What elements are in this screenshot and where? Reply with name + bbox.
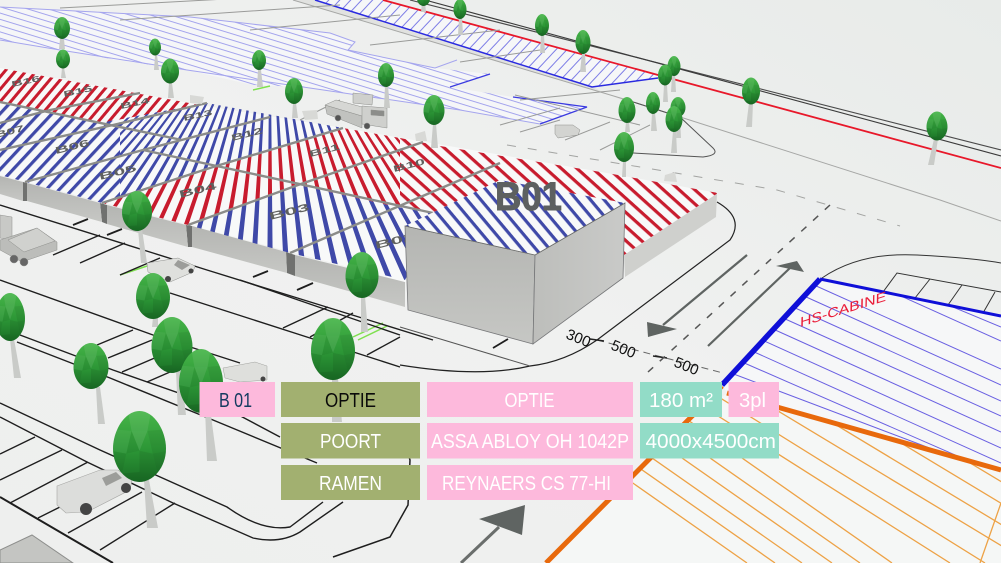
red roofs far [0,68,200,123]
roof unit labels: B05 [98,163,138,182]
roof unit labels: B04 [178,180,219,200]
cell: OPTIE value [427,382,633,417]
dimension labels [564,326,701,379]
tree [924,112,950,165]
cell: B 01 [200,382,275,417]
roof unit labels: B12 [230,125,264,143]
cell: door size: 4000x4500cm [646,431,776,453]
roof dividers [0,93,500,253]
small far vehicles [190,95,677,182]
tree [416,0,431,12]
tree [452,0,468,35]
road curve and dimension line [400,202,735,373]
cell: area: 180 m² [649,390,713,412]
blue roofs left [0,102,120,203]
truck left [0,215,57,266]
cell: REYNAERS: REYNAERS CS 77-HI [442,473,611,495]
red roof front [104,167,296,225]
tree [251,50,267,87]
roof unit labels: B13 [183,108,213,123]
parking bays [822,255,1001,313]
blue roof next to B01 [298,207,431,280]
cell: door size [640,423,779,458]
cell: POORT label: POORT [320,431,381,453]
cell: OPTIE label [281,382,420,417]
tree [740,78,762,127]
tree [133,273,173,327]
tree [147,317,197,415]
dimension labels: 500 [672,354,701,379]
truck far [325,93,387,129]
tree [617,97,637,132]
bottom left building [0,535,73,563]
cell: OPTIE label: OPTIE [325,390,376,412]
tree [307,318,359,422]
tree [657,64,673,102]
arrow: road direction down [647,255,747,337]
tree [55,50,71,78]
cell: POORT label [281,423,420,458]
van near [223,362,267,382]
tree [52,17,72,49]
roof unit labels [0,74,426,251]
tree [175,349,227,461]
cell: parking count: 3pl [739,390,766,412]
label: HS-CABINE: HS-CABINE [800,288,886,330]
building row walls [0,176,405,307]
cell: REYNAERS [427,465,633,500]
roof unit labels: B16 [11,74,41,89]
roof unit labels: B03 [268,201,311,222]
tree [376,63,396,108]
tree [108,411,171,528]
CAD parking lines far side [0,0,715,157]
van far [555,125,580,138]
tree [421,95,447,148]
arrow: bottom road [461,505,525,563]
boundary lines [293,0,1001,226]
tree [119,191,155,263]
roof base [0,68,718,282]
road lines front left [0,205,508,563]
plot border [820,279,1001,316]
cell: area [640,382,722,417]
tree [666,56,682,92]
label: B01: B01 [495,175,562,219]
tree [664,106,684,153]
blue roofs centre [120,103,339,196]
red roofs right [400,138,718,255]
roof unit labels: B02 [374,230,416,251]
van foreground [57,470,132,515]
hatched central plot [0,7,587,124]
plot: HS cabine [722,255,1001,475]
dimension labels: 500 [609,337,638,362]
tree [534,14,550,53]
cell: RAMEN label: RAMEN [319,473,382,495]
tree [283,78,305,118]
cell: ASSA ABLOY: ASSA ABLOY OH 1042P [431,431,629,453]
roof unit labels: B14 [120,96,150,111]
hatched plot top right [315,0,658,87]
tree [612,132,636,177]
cell: B 01: B 01 [219,390,252,412]
van mid [147,258,195,282]
cell: ASSA ABLOY [427,423,633,458]
red roofs centre [226,128,400,205]
tree [342,252,382,332]
blue roof front [197,186,390,252]
cell: parking count [728,382,779,417]
arrow: road direction up [708,261,804,346]
tree [70,343,112,424]
plot: orange zone [544,386,1001,563]
info table [200,382,779,500]
roof unit labels: B15 [63,84,93,99]
road shoulder band [293,0,640,108]
tree [574,30,592,72]
annex wall [624,193,717,277]
cell: RAMEN label [281,465,420,500]
roof unit labels: B11 [308,141,341,159]
roof unit labels: B10 [392,156,426,174]
tree [148,38,162,70]
far bright green strips [120,86,387,340]
tree [645,92,661,131]
centre dashes [648,205,830,372]
roof unit labels: B06 [54,138,91,156]
dimension labels: 300 [564,326,593,351]
tree [0,293,28,378]
cell: OPTIE value: OPTIE [504,390,554,412]
building B01 [405,175,625,344]
tree [159,58,181,98]
tree [669,97,687,138]
